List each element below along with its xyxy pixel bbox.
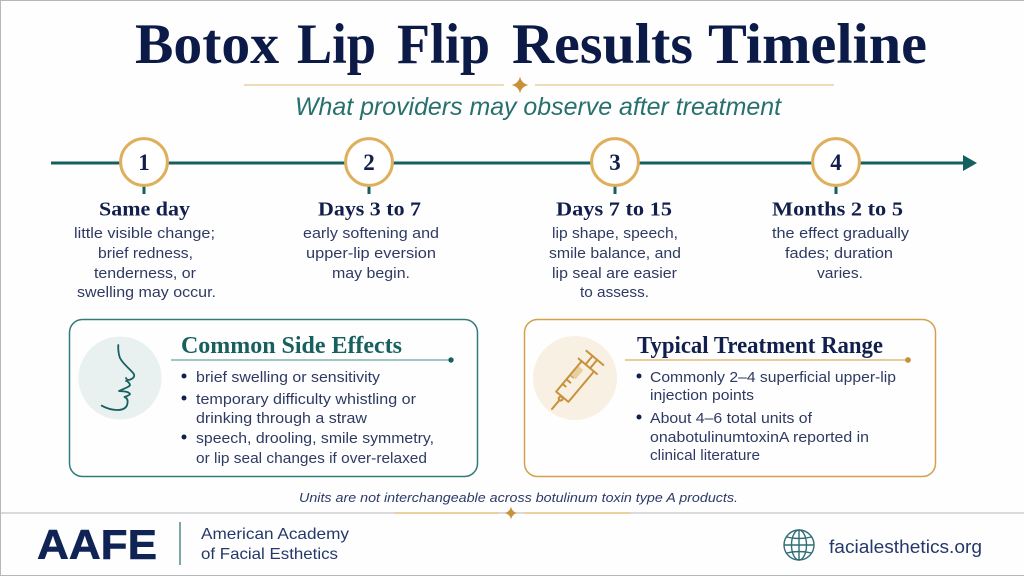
icon: syringe <box>533 336 617 420</box>
title: Timeline <box>708 13 927 76</box>
bullet list: injection points <box>650 388 754 404</box>
footnote: Units are not interchangeable across botulinum toxin type A products. <box>299 490 738 505</box>
step 2 marker <box>346 139 392 194</box>
bullet list <box>636 370 896 464</box>
step 3 text: lip shape, speech, <box>552 226 678 242</box>
footer logo: AAFE <box>37 521 349 568</box>
step 3 marker <box>592 139 638 194</box>
panel: common side effects <box>70 320 478 476</box>
title: Lip <box>297 13 376 76</box>
step 4 text: fades; duration <box>785 246 893 262</box>
step 3 text <box>549 198 681 301</box>
step 1 text: brief redness, <box>98 246 193 262</box>
timeline axis arrow <box>51 155 977 171</box>
icon: face profile <box>78 336 162 420</box>
step 4 text: Months 2 to 5 <box>772 198 903 220</box>
bullet list: or lip seal changes if over-relaxed <box>196 451 427 467</box>
step 1 text <box>74 198 216 301</box>
timeline <box>51 139 977 194</box>
bullet list: onabotulinumtoxinA reported in <box>650 430 869 446</box>
panel: typical treatment range <box>524 320 936 476</box>
step 1 text: Same day <box>99 198 190 220</box>
step 2 text: may begin. <box>332 266 410 282</box>
step 4 marker: 4 <box>830 150 842 175</box>
bullet list: drinking through a straw <box>196 411 368 427</box>
step 3 text: Days 7 to 15 <box>556 198 672 220</box>
step 1 text: tenderness, or <box>94 266 196 282</box>
bullet list: clinical literature <box>650 448 760 464</box>
step 1 marker: 1 <box>138 150 150 175</box>
bullet list: temporary difficulty whistling or <box>196 392 416 408</box>
step 4 marker <box>813 139 859 194</box>
icon: globe <box>784 530 814 560</box>
step 3 marker: 3 <box>609 150 621 175</box>
step 2 marker: 2 <box>363 150 375 175</box>
step 2 text: Days 3 to 7 <box>318 198 421 220</box>
heading: Typical Treatment Range <box>637 333 883 359</box>
step 3 text: to assess. <box>580 285 649 301</box>
step 1 text: little visible change; <box>74 226 215 242</box>
step 3 text: smile balance, and <box>549 246 681 262</box>
footer logo: AAFE: American Academy <box>201 526 349 543</box>
title <box>135 13 927 76</box>
bullet list <box>182 370 434 467</box>
title: Flip <box>397 13 490 76</box>
step 2 text: early softening and <box>303 226 439 242</box>
step 4 text: the effect gradually <box>772 226 910 242</box>
title divider with star <box>244 76 834 94</box>
step 1 marker <box>121 139 167 194</box>
step 4 text: varies. <box>817 266 863 282</box>
title: Botox <box>135 13 279 76</box>
footer logo: AAFE: AAFE <box>37 521 157 568</box>
heading: Common Side Effects <box>181 333 402 359</box>
subtitle: What providers may observe after treatment <box>295 93 782 121</box>
step 2 text: upper-lip eversion <box>306 246 436 262</box>
footer logo: AAFE: of Facial Esthetics <box>201 546 338 563</box>
footer divider with star <box>0 506 1024 520</box>
title: Results <box>512 13 693 76</box>
step 2 text <box>303 198 439 282</box>
step 4 text <box>772 198 910 282</box>
heading rule <box>171 357 454 363</box>
step 1 text: swelling may occur. <box>77 285 216 301</box>
step 3 text: lip seal are easier <box>552 266 677 282</box>
website: facialesthetics.org <box>829 537 982 557</box>
bullet list: brief swelling or sensitivity <box>196 370 381 386</box>
bullet list: About 4–6 total units of <box>650 411 813 427</box>
heading rule <box>625 357 911 363</box>
bullet list: speech, drooling, smile symmetry, <box>196 431 434 447</box>
bullet list: Commonly 2–4 superficial upper-lip <box>650 370 896 386</box>
